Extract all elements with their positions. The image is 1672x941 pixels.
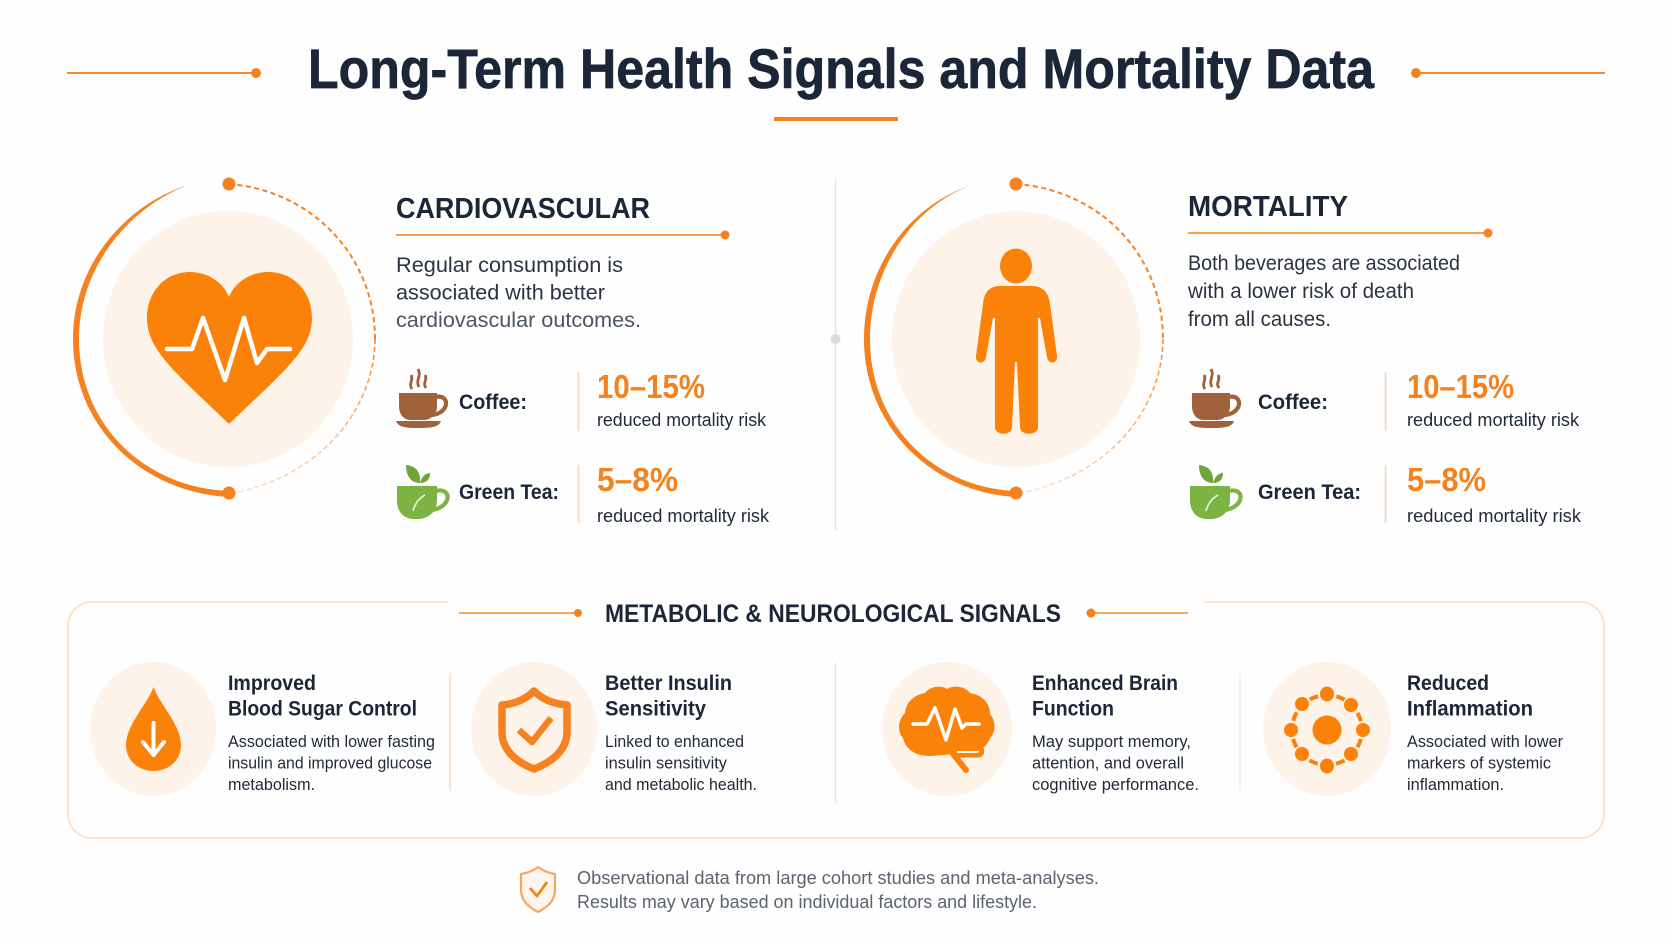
- icon: heart ring: [73, 178, 375, 500]
- card description: and metabolic health.: [605, 776, 757, 794]
- description: associated with better: [396, 280, 605, 304]
- card description: [1407, 733, 1563, 794]
- coffee stat: reduced mortality risk: [597, 410, 767, 430]
- card title: [605, 672, 732, 720]
- footer note: [521, 867, 1099, 912]
- description: [1187, 252, 1460, 331]
- coffee stat: [1407, 368, 1580, 430]
- coffee stat: [597, 368, 767, 430]
- card description: [228, 733, 435, 794]
- card description: attention, and overall: [1032, 754, 1184, 772]
- heading: MORTALITY: [1188, 191, 1348, 223]
- icon: brain with pulse: [882, 662, 1012, 796]
- card title: Improved: [228, 672, 316, 695]
- card title: Function: [1032, 698, 1114, 720]
- icon: drop with arrow: [90, 662, 216, 796]
- description: Both beverages are associated: [1188, 252, 1460, 275]
- card description: Associated with lower fasting: [228, 733, 435, 751]
- title underline: [774, 117, 898, 121]
- card description: inflammation.: [1407, 776, 1504, 794]
- card description: [1032, 733, 1199, 794]
- card title: Reduced: [1407, 672, 1489, 695]
- heading: CARDIOVASCULAR: [396, 193, 650, 225]
- heading rule: [396, 230, 730, 240]
- panel border: [68, 602, 1604, 838]
- divider: [1384, 372, 1386, 431]
- card title: Sensitivity: [605, 698, 706, 720]
- card title: Better Insulin: [605, 672, 732, 695]
- title: Long-Term Health Signals and Mortality Data: [308, 37, 1375, 100]
- card description: insulin and improved glucose: [228, 754, 432, 772]
- card: brain function: [882, 662, 1199, 796]
- card: inflammation: [1263, 662, 1563, 796]
- card title: Blood Sugar Control: [228, 698, 417, 720]
- green tea stat: reduced mortality risk: [597, 506, 770, 526]
- center divider: [830, 179, 840, 530]
- coffee stat: 10–15%: [597, 368, 705, 405]
- card description: insulin sensitivity: [605, 754, 728, 772]
- card title: Enhanced Brain: [1032, 672, 1178, 695]
- title left rule: [67, 68, 261, 78]
- card description: May support memory,: [1032, 733, 1191, 751]
- panel: metabolic and neurological signals: [68, 600, 1604, 838]
- card description: markers of systemic: [1407, 754, 1551, 772]
- card description: Associated with lower: [1407, 733, 1563, 751]
- card title: Inflammation: [1407, 698, 1533, 720]
- description: with a lower risk of death: [1187, 280, 1414, 303]
- header: [67, 37, 1605, 121]
- icon: coffee cup: [1189, 369, 1239, 428]
- title right rule: [1411, 68, 1605, 78]
- icon: shield with check: [471, 662, 597, 796]
- heading left rule: [459, 609, 582, 617]
- footer text: Results may vary based on individual factors and lifestyle.: [577, 891, 1037, 912]
- card title: [1407, 672, 1533, 720]
- green tea stat: 5–8%: [597, 461, 678, 498]
- green tea label: Green Tea:: [459, 481, 559, 504]
- panel: mortality: [864, 178, 1582, 526]
- green tea label: Green Tea:: [1258, 481, 1361, 504]
- card description: Linked to enhanced: [605, 733, 744, 751]
- card description: metabolism.: [228, 776, 315, 794]
- card title: [228, 672, 417, 720]
- coffee stat: reduced mortality risk: [1407, 410, 1580, 430]
- green tea stat: [1407, 461, 1582, 526]
- coffee label: Coffee:: [1258, 391, 1328, 414]
- heading right rule: [1086, 608, 1188, 618]
- description: cardiovascular outcomes.: [396, 308, 641, 332]
- icon: inflammation cluster: [1263, 662, 1391, 796]
- coffee stat: 10–15%: [1407, 368, 1514, 405]
- panel: cardiovascular: [73, 178, 770, 526]
- description: [396, 253, 641, 332]
- section heading: METABOLIC & NEUROLOGICAL SIGNALS: [605, 600, 1061, 628]
- card description: cognitive performance.: [1032, 776, 1199, 794]
- divider: [578, 465, 580, 523]
- card description: [605, 733, 757, 794]
- divider: [1384, 465, 1386, 523]
- icon: green tea cup: [397, 465, 448, 519]
- description: from all causes.: [1188, 308, 1331, 331]
- footer text: Observational data from large cohort studies and meta-analyses.: [577, 867, 1099, 888]
- footer text: [577, 867, 1099, 912]
- icon: footer shield: [521, 867, 555, 912]
- coffee label: Coffee:: [459, 391, 527, 414]
- icon: coffee cup: [396, 369, 446, 428]
- description: Regular consumption is: [396, 253, 623, 277]
- card title: [1032, 672, 1178, 720]
- divider: [578, 372, 580, 431]
- card: blood sugar: [90, 662, 435, 796]
- heading rule: [1188, 228, 1492, 238]
- green tea stat: 5–8%: [1407, 461, 1486, 498]
- green tea stat: reduced mortality risk: [1407, 506, 1582, 526]
- green tea stat: [597, 461, 770, 526]
- icon: green tea cup: [1190, 465, 1241, 519]
- icon: person ring: [864, 178, 1163, 500]
- card: insulin sensitivity: [471, 662, 757, 796]
